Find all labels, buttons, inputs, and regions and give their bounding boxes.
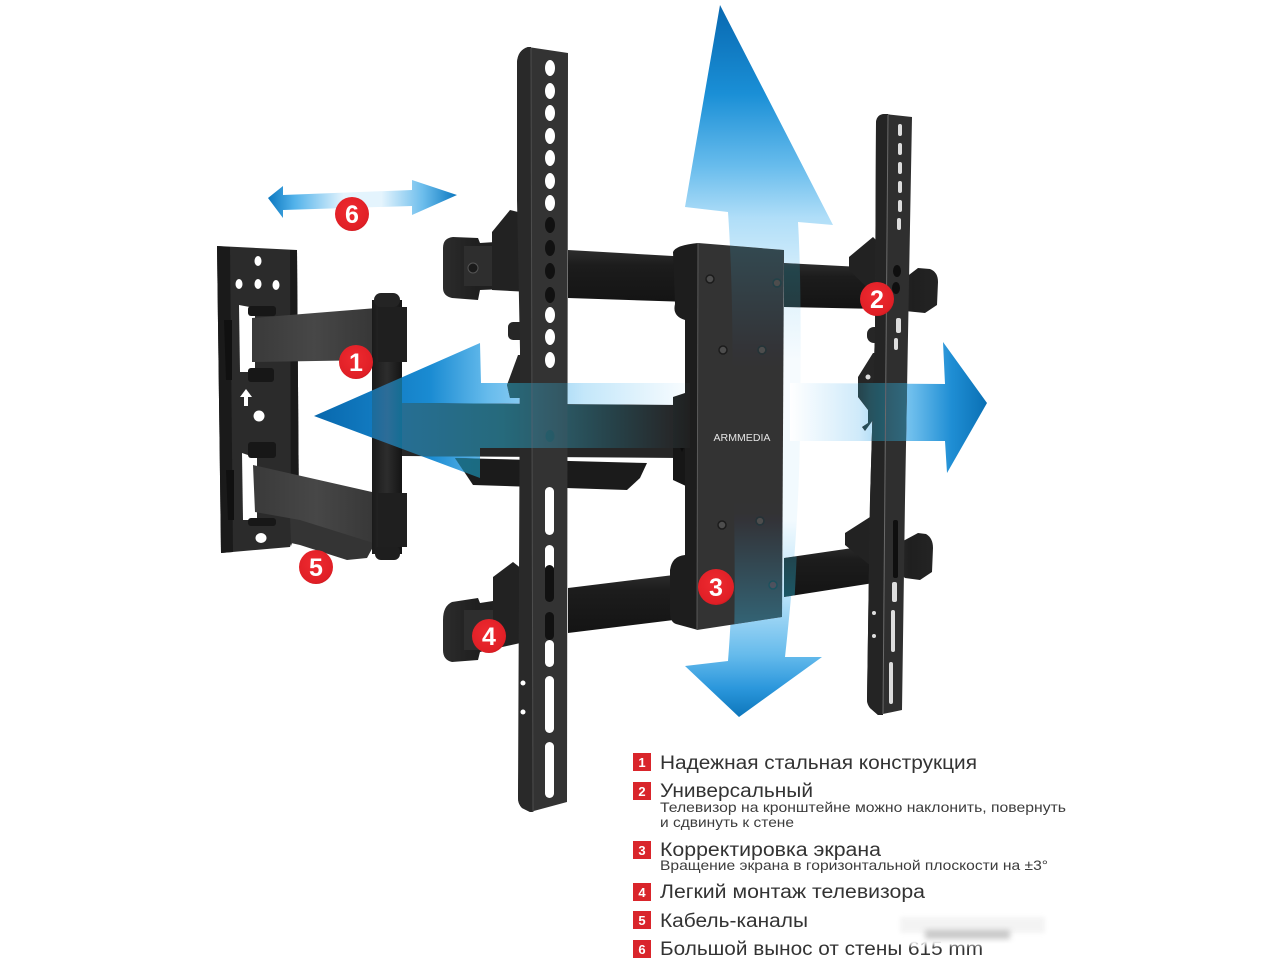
- feature legend: [633, 753, 1066, 960]
- badge 6: 6: [345, 201, 359, 229]
- legend item 2: Телевизор на кронштейне можно наклонить, повернуть: [660, 799, 1066, 815]
- right bracket tabs: [845, 237, 885, 575]
- block rivets: [706, 275, 781, 589]
- badge 2: [860, 282, 894, 316]
- legend item 3: 3: [638, 843, 646, 858]
- badge 4: 4: [482, 623, 496, 651]
- legend item 3: [633, 840, 1048, 873]
- badge 5: 5: [309, 554, 323, 582]
- badge 6: [335, 197, 369, 231]
- hinge post: [372, 293, 407, 560]
- legend item 5: 5: [638, 913, 646, 928]
- legend item 6: Большой вынос от стены 615 mm: [660, 939, 983, 960]
- left vertical TV plate: [517, 47, 568, 812]
- legend item 2: и сдвинуть к стене: [660, 814, 794, 830]
- plate holes: [520, 60, 555, 798]
- legend item 1: Надежная стальная конструкция: [660, 753, 977, 774]
- badge 4: [472, 619, 506, 653]
- centre swivel block: [670, 243, 784, 630]
- overlay: right arrow on metal: [830, 383, 920, 441]
- plate holes: [866, 124, 902, 704]
- legend item 2: Универсальный: [660, 781, 813, 802]
- arrow: extension distance: [268, 180, 457, 218]
- legend item 3: Вращение экрана в горизонтальной плоскости на ±3°: [660, 857, 1048, 873]
- legend item 3: Корректировка экрана: [660, 840, 881, 861]
- upper arm: [252, 308, 377, 362]
- legend item 6: 6: [638, 942, 646, 957]
- arrow: down: [685, 420, 822, 717]
- legend item 1: 1: [638, 755, 646, 770]
- translucent arrow overlay on the mount: [314, 212, 920, 640]
- overlay: vertical arrow on metal: [728, 212, 801, 640]
- plate cut-outs and holes: [236, 256, 280, 543]
- wall-side arm assembly: [217, 246, 407, 560]
- lower cable channel: [290, 515, 376, 560]
- badge 1: [339, 345, 373, 379]
- legend item 5: Кабель-каналы: [660, 911, 808, 932]
- arrow: up: [685, 5, 833, 420]
- TV-side mount assembly: [402, 47, 938, 812]
- right vertical TV plate: [866, 114, 912, 715]
- badge 3: 3: [709, 574, 723, 602]
- lower crossbar: [568, 544, 880, 633]
- lower arm: [253, 465, 380, 545]
- blue arrows behind the mount: [314, 5, 987, 717]
- arrow: right: [790, 342, 987, 473]
- arrow: left: [314, 343, 700, 478]
- badge 5: [299, 550, 333, 584]
- badge 1: 1: [349, 349, 363, 377]
- legend item 2: [633, 781, 1066, 830]
- left end caps: [443, 237, 525, 662]
- left bracket tabs: [492, 210, 530, 640]
- overlay: left arrow on metal: [314, 343, 690, 478]
- brand logo: ARMMEDIA: [714, 433, 771, 444]
- legend item 2: 2: [638, 784, 646, 799]
- wall plate: [217, 246, 299, 553]
- numbered badges: [299, 197, 894, 653]
- icon: plate up arrow: [240, 389, 252, 406]
- badge 2: 2: [870, 286, 884, 314]
- adjustment knobs: [507, 322, 885, 431]
- upper crossbar: [568, 250, 880, 309]
- badge 3: [698, 569, 734, 605]
- legend item 4: Легкий монтаж телевизора: [660, 882, 925, 903]
- right end caps: [895, 268, 938, 580]
- watermark smudge: [900, 917, 1045, 945]
- support arm: [402, 392, 689, 490]
- legend item 4: 4: [638, 885, 646, 900]
